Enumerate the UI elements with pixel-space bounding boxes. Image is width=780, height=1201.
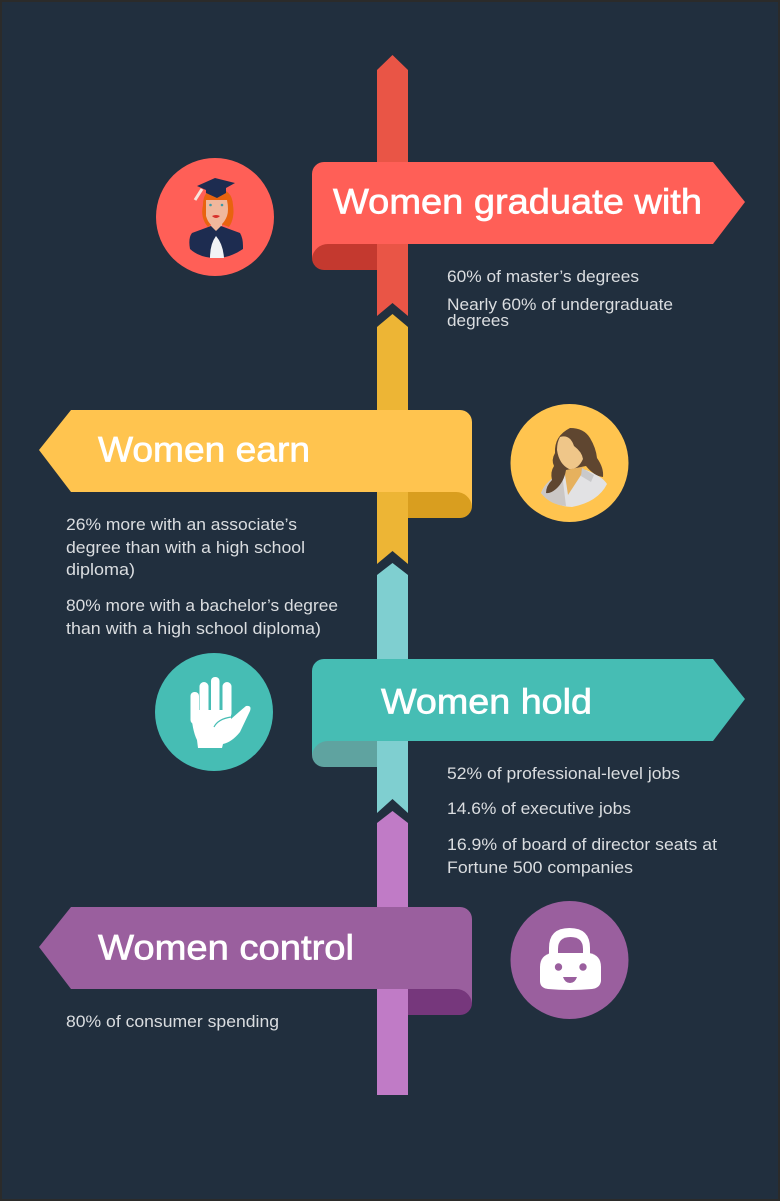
text: graduate facts: degrees: [447, 312, 509, 330]
ribbon stem: teal: [377, 563, 408, 813]
banner: purple: [39, 907, 472, 1003]
heading: women hold: Women hold: [381, 682, 592, 722]
text: earnings facts: 80% more with a bachelor’s degree: [66, 597, 338, 615]
text: earnings facts: diploma): [66, 561, 135, 579]
text: graduate facts: Nearly 60% of undergraduate: [447, 296, 673, 314]
text: earnings facts: than with a high school diploma): [66, 620, 321, 638]
text: jobs facts: Fortune 500 companies: [447, 859, 633, 877]
ribbon stem: red: [377, 55, 408, 316]
banner: red: [312, 162, 745, 258]
text: earnings facts: degree than with a high school: [66, 539, 305, 557]
icon: smiling lock: [510, 901, 628, 1019]
icon: graduate woman: [156, 158, 274, 276]
heading: women earn: Women earn: [98, 430, 310, 470]
text: jobs facts: [447, 765, 717, 877]
text: jobs facts: 52% of professional-level jobs: [447, 765, 680, 783]
section: women control: [39, 901, 628, 1031]
text: jobs facts: 14.6% of executive jobs: [447, 800, 631, 818]
section: women graduate with: [156, 158, 745, 330]
text: jobs facts: 16.9% of board of director seats at: [447, 836, 717, 854]
banner: yellow: [39, 410, 472, 506]
ribbon stem: purple: [377, 811, 408, 1095]
text: graduate facts: 60% of master’s degrees: [447, 268, 639, 286]
section: women hold: [155, 653, 745, 877]
text: graduate facts: [447, 268, 673, 330]
banner fold: purple: [408, 985, 472, 1015]
heading: women graduate with: Women graduate with: [333, 182, 702, 222]
banner fold: yellow: [408, 488, 472, 518]
section: women earn: [39, 404, 628, 638]
text: spending fact: 80% of consumer spending: [66, 1013, 279, 1031]
icon: raised hand: [155, 653, 273, 771]
banner fold: teal: [312, 737, 377, 767]
heading: women control: Women control: [98, 928, 354, 968]
text: earnings facts: [66, 516, 338, 638]
banner: teal: [312, 659, 745, 755]
banner fold: red: [312, 240, 377, 270]
icon: woman portrait: [510, 404, 628, 522]
ribbon stem: yellow: [377, 314, 408, 564]
text: earnings facts: 26% more with an associate’s: [66, 516, 297, 534]
